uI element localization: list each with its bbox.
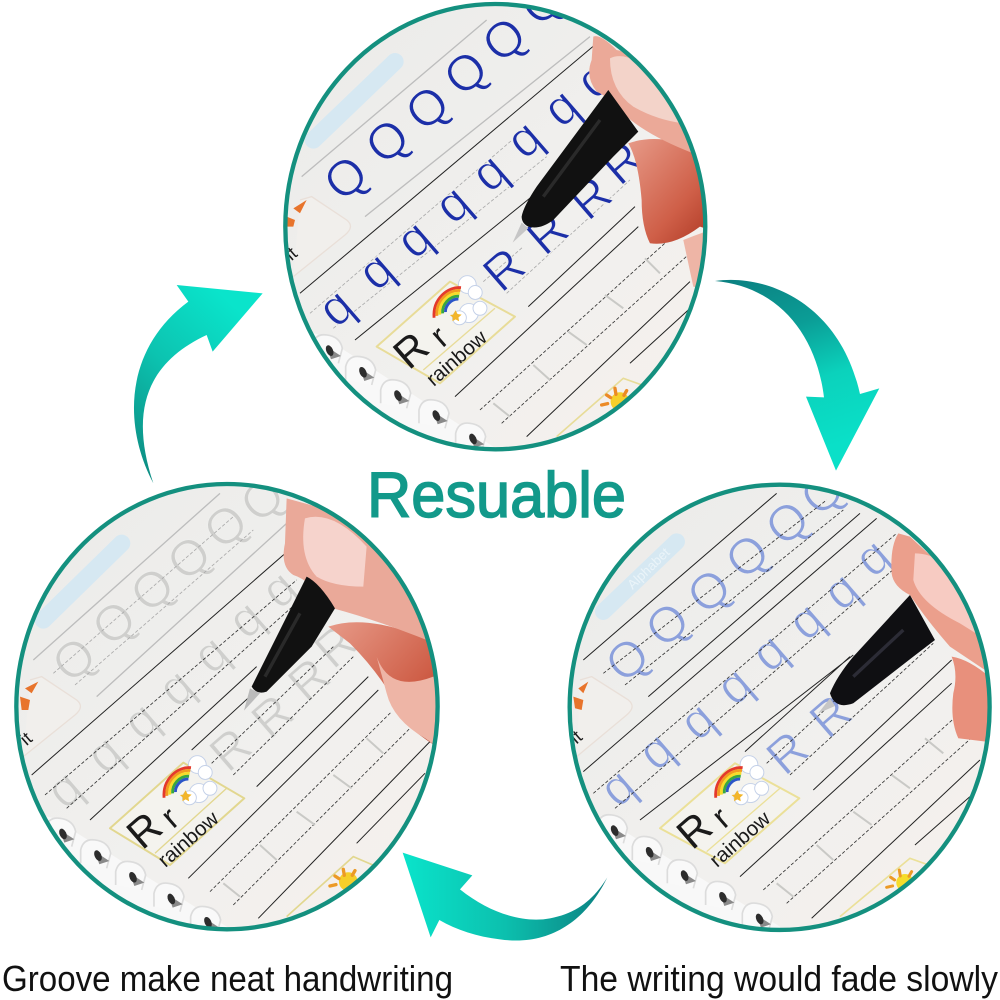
faded letters: q — [217, 589, 275, 649]
spiral binding — [312, 335, 486, 452]
title: Resuable — [367, 459, 626, 531]
panel: top circle, freshly written letters — [280, 0, 720, 467]
fading blue letters: Q — [676, 557, 742, 625]
fading blue letters: Q — [789, 459, 855, 527]
caption: left circle: Groove make neat handwriting — [2, 958, 453, 999]
handwritten letters — [307, 0, 654, 338]
card: sun — [287, 857, 377, 917]
fading blue letters: Q — [714, 522, 780, 590]
panel: left circle, writing faded, ready to reuse: it — [15, 727, 36, 749]
spiral binding — [597, 815, 772, 932]
fading blue letters: q — [627, 720, 685, 781]
card: R r rainbow: r — [705, 800, 738, 836]
card: R r rainbow — [110, 756, 244, 872]
card: sun — [557, 378, 647, 437]
panel: right circle, writing fading — [568, 482, 992, 932]
faded letters: R — [304, 613, 368, 679]
card: R r rainbow — [660, 756, 799, 872]
arrow: top to right — [715, 280, 879, 471]
handwritten letters: q — [385, 209, 443, 269]
fading blue letters: q — [843, 527, 901, 588]
label text: Alphabet: Alphabet — [624, 545, 673, 592]
handwritten letters: Q — [354, 107, 420, 175]
fading blue letters: q — [589, 757, 646, 818]
fading blue letters — [589, 459, 901, 818]
handwritten letters: q — [307, 277, 365, 338]
faded letters: Q — [193, 492, 259, 560]
faded letters: q — [112, 690, 170, 751]
handwritten letters: Q — [394, 74, 460, 142]
fading blue letters: q — [705, 655, 763, 716]
fading blue letters: R — [755, 720, 819, 786]
faded letters: Q — [156, 524, 222, 592]
spiral binding — [46, 818, 221, 935]
panel: top circle, freshly written letters: it — [280, 242, 301, 264]
arrow: bottom right to bottom left — [403, 853, 607, 941]
panel: right circle, writing fading: it — [565, 726, 586, 748]
faded letters: q — [35, 759, 93, 819]
card: R r rainbow: rainbow — [422, 326, 492, 391]
faded letters: q — [250, 559, 308, 619]
handwritten letters: R — [472, 236, 536, 302]
handwritten letters: q — [347, 240, 405, 301]
fading blue letters: q — [668, 690, 726, 751]
fading blue letters: q — [740, 622, 798, 683]
fading blue letters: Q — [634, 591, 700, 658]
fading blue letters: Q — [754, 489, 820, 557]
faded letters: Q — [81, 589, 147, 657]
fading blue letters: R — [799, 683, 863, 749]
fading blue letters: q — [812, 560, 870, 621]
handwritten letters: Q — [433, 39, 499, 107]
faded letters: Q — [119, 556, 185, 623]
faded letters: q — [182, 624, 240, 684]
card: R r rainbow: R — [117, 802, 171, 858]
handwritten letters: Q — [471, 6, 537, 73]
handwritten letters: q — [460, 142, 518, 203]
card: R r rainbow: r — [423, 319, 456, 355]
hand and pen — [512, 36, 704, 287]
arrow: left to top — [134, 285, 263, 483]
faded letters: R — [240, 683, 304, 749]
faded letters — [35, 466, 368, 819]
card: R r rainbow: r — [154, 800, 187, 836]
card: R r rainbow: rainbow — [154, 807, 223, 872]
handwritten letters: q — [565, 49, 623, 109]
faded letters: Q — [41, 626, 107, 693]
card: R r rainbow — [377, 276, 515, 391]
handwritten letters: q — [532, 77, 590, 138]
fading blue letters: q — [777, 590, 835, 651]
hand and pen — [818, 533, 1000, 743]
handwritten letters: q — [423, 174, 481, 234]
panel: left circle, writing faded, ready to reuse — [14, 482, 440, 932]
card: sun — [840, 858, 933, 917]
faded letters: q — [147, 657, 205, 718]
handwritten letters: Q — [313, 144, 379, 212]
card: R r rainbow: R — [384, 322, 438, 378]
faded letters: R — [199, 716, 263, 782]
handwritten letters: R — [590, 130, 654, 196]
handwritten letters: R — [559, 165, 623, 231]
card: R r rainbow: R — [667, 802, 721, 858]
handwritten letters: R — [515, 200, 579, 266]
handwritten letters: q — [495, 109, 553, 169]
faded letters: Q — [229, 466, 295, 533]
faded letters: R — [277, 646, 341, 712]
hand and pen — [244, 498, 447, 753]
card: R r rainbow: rainbow — [705, 807, 775, 872]
fading blue letters: Q — [594, 626, 660, 693]
faded letters: q — [75, 724, 133, 784]
